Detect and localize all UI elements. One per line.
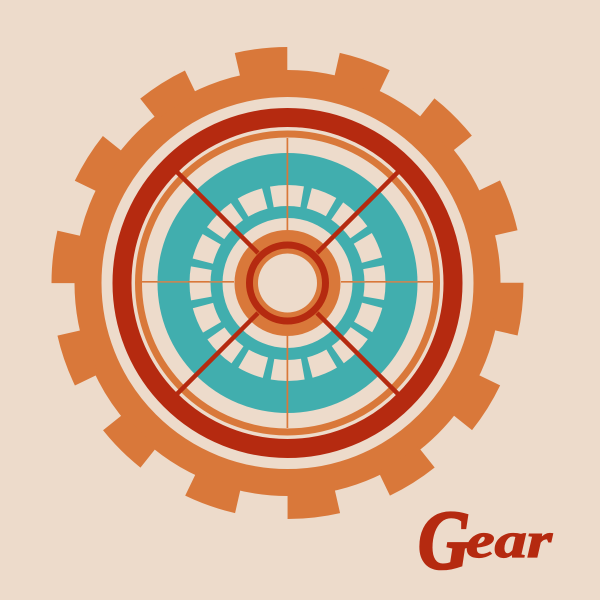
title: Gear: G (418, 494, 470, 587)
teal disc (158, 153, 418, 413)
cream hub centre (258, 254, 317, 312)
cream inner disc (222, 218, 352, 348)
red hub ring (250, 245, 326, 321)
orange hub ring (234, 230, 340, 336)
thin crosshair lines (142, 138, 433, 428)
title: Gear (418, 494, 553, 587)
orange thin ring (138, 134, 436, 432)
red diagonal spokes (177, 172, 398, 394)
title: Gear: ear (466, 512, 553, 568)
ring of cream segments (200, 196, 375, 370)
gear wheel with teeth (65, 60, 510, 506)
red outer ring (122, 118, 453, 448)
